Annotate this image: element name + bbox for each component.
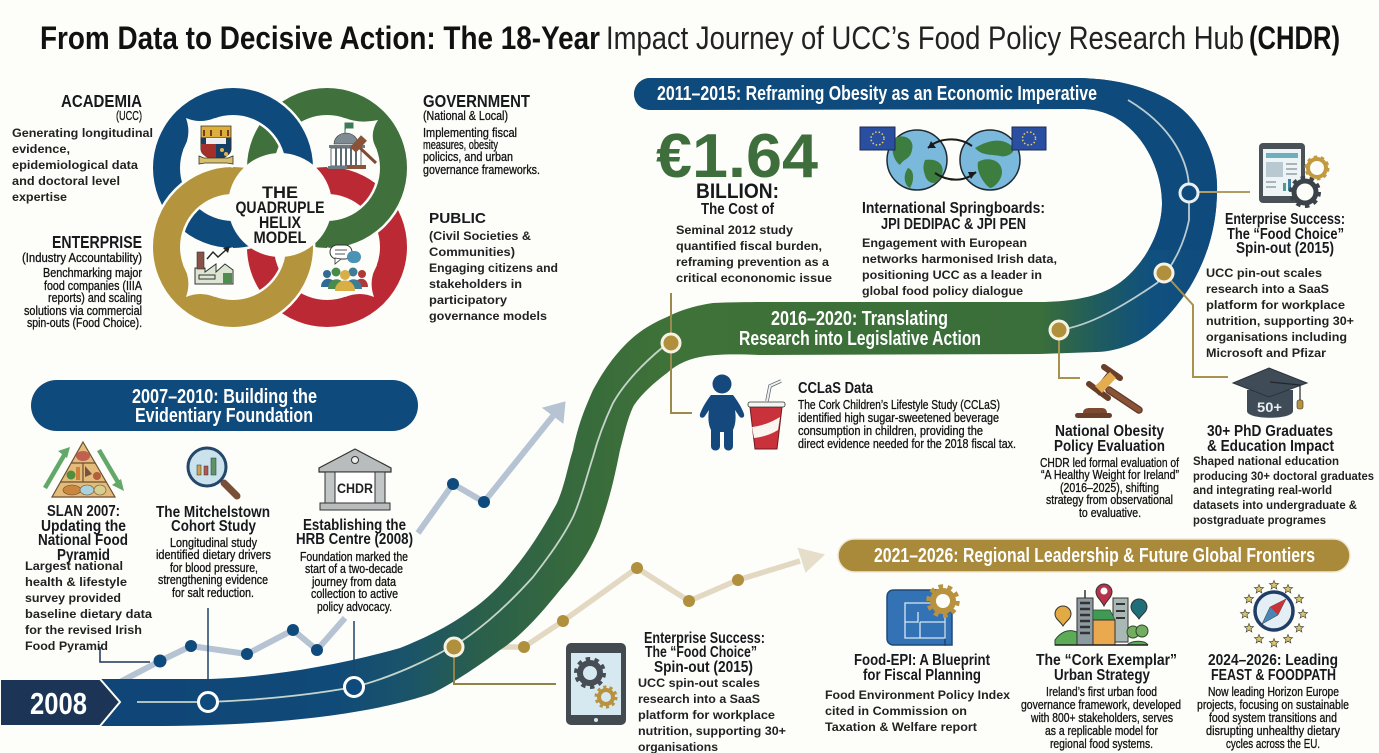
body: cost: [676, 223, 832, 285]
body: cost: reframing prevention as a: [676, 255, 829, 269]
heading: enterprise bottom: The “Food Choice”: [645, 644, 757, 661]
blue rising arrow: [118, 402, 565, 683]
icon: gavel: [1075, 367, 1139, 418]
body: enterprise success: UCC pin-out scales: [1206, 266, 1322, 280]
heading: enterprise bottom: Spin-out (2015): [654, 659, 753, 676]
heading: billion: The Cost of: [701, 201, 775, 218]
heading: national obesity: National Obesity: [1055, 423, 1164, 440]
body: cost: critical econonomic issue: [676, 271, 832, 285]
icon: CHDR temple: [319, 449, 391, 510]
body: Cork: governance framework, developed: [1021, 697, 1181, 712]
heading: 2016-2020: Research into Legislative Action: [739, 328, 981, 350]
body: SLAN: Food Pyramid: [25, 639, 108, 653]
icon: tablet and gears: [1259, 143, 1328, 206]
timeline nodes: [198, 184, 1198, 712]
icon: blueprint and gear: [887, 586, 958, 645]
icon: university crest: [199, 126, 233, 164]
heading: FEAST: [1208, 652, 1338, 684]
body: SLAN: survey provided: [25, 591, 121, 605]
text: academia: Generating longitudinal: [12, 126, 153, 140]
blue arrow nodes: [154, 478, 490, 668]
body: SLAN: [25, 559, 152, 653]
panel: SLAN 2007: [25, 442, 152, 653]
leader lines: [100, 192, 1250, 702]
panel: enterprise success bottom: [566, 630, 786, 753]
text: public: Communities): [429, 245, 515, 259]
body: Cork: Ireland’s first urban food: [1046, 684, 1157, 699]
body: Mitchelstown: for blood pressure,: [170, 560, 258, 575]
panel: enterprise success top right: [1206, 143, 1354, 360]
heading: Cork: The “Cork Exemplar”: [1036, 652, 1177, 669]
body: springboards: networks harmonised Irish data,: [862, 252, 1057, 266]
heading: Food-EPI: Food-EPI: A Blueprint: [854, 652, 991, 669]
text: academia: epidemiological data: [12, 158, 138, 172]
text: enterprise: reports) and scaling: [48, 290, 142, 305]
text: government: governance frameworks.: [423, 162, 540, 177]
body: FEAST: disrupting unhealthy dietary: [1206, 723, 1340, 738]
text: public: participatory: [429, 293, 507, 307]
icon: compass and EU stars: [1240, 580, 1308, 647]
main timeline road: [90, 78, 1217, 726]
heading: enterprise success: Spin-out (2015): [1236, 240, 1334, 257]
body: HRB: Foundation marked the: [300, 549, 408, 564]
body: SLAN: health & lifestyle: [25, 575, 127, 589]
title: From Data to Decisive Action: The 18-Year: [40, 20, 600, 56]
heading: springboards: JPI DEDIPAC & JPI PEN: [881, 216, 1026, 233]
heading: enterprise bottom: Enterprise Success:: [644, 630, 765, 647]
heading: HRB: HRB Centre (2008): [296, 531, 413, 548]
body: Cork: [1021, 684, 1181, 751]
text: government: measures, obesity: [423, 137, 498, 152]
body: HRB: policy advocacy.: [317, 599, 392, 614]
body: Mitchelstown: for salt reduction.: [172, 585, 254, 600]
heading: Cork: Urban Strategy: [1054, 667, 1150, 684]
body: Food-EPI: [825, 688, 1010, 734]
text: enterprise: [22, 232, 143, 330]
text: public: [429, 210, 558, 323]
ring: academia: [166, 102, 300, 234]
heading: FEAST: 2024–2026: Leading: [1208, 652, 1338, 669]
panel: HRB Centre: [296, 449, 413, 614]
body: enterprise bottom: platform for workplace: [638, 708, 775, 722]
body: CCLaS: The Cork Children’s Lifestyle Study (CCLaS): [798, 397, 1000, 412]
body: enterprise success: [1206, 266, 1354, 360]
centre hub: QUADRUPLE: [236, 199, 324, 217]
body: FEAST: [1197, 684, 1349, 751]
body: cost: Seminal 2012 study: [676, 223, 793, 237]
text: public: PUBLIC: [429, 210, 486, 227]
body: PhD: and integrating real-world: [1193, 483, 1332, 497]
heading: SLAN: National Food: [38, 532, 128, 549]
centre hub: THE: [262, 184, 298, 202]
body: Mitchelstown: identified dietary drivers: [156, 547, 271, 562]
heading pill: 2021-2026: [838, 539, 1350, 572]
icon: graduation cap: [1233, 368, 1307, 418]
year banner: 2008: 2008: [30, 686, 87, 721]
icon: CHDR temple: CHDR: [337, 481, 373, 496]
body: PhD: Shaped national education: [1193, 454, 1339, 468]
body: PhD: datasets into undergraduate &: [1193, 498, 1357, 512]
body: FEAST: cycles across the EU.: [1226, 736, 1320, 751]
body: HRB: journey from data: [311, 574, 397, 589]
ring: enterprise: [166, 180, 300, 314]
heading: 2016-2020: 2016–2020: Translating: [771, 308, 948, 330]
title: Impact Journey of UCC’s Food Policy Research Hub: [606, 20, 1244, 56]
heading: springboards: [862, 200, 1045, 233]
heading: national obesity: Policy Evaluation: [1054, 438, 1165, 455]
heading: Mitchelstown: The Mitchelstown: [156, 504, 270, 521]
body: HRB: [300, 549, 408, 614]
text: academia: (UCC): [116, 108, 142, 123]
body: Food-EPI: Taxation & Welfare report: [825, 720, 977, 734]
heading: SLAN: Updating the: [41, 518, 126, 535]
icon: citizens and chat: [321, 245, 368, 291]
body: national obesity: [1040, 455, 1179, 520]
panel: CCLaS: [700, 374, 1016, 451]
body: Cork: with 800+ stakeholders, serves: [1030, 710, 1173, 725]
body: national obesity: CHDR led formal evaluation of: [1040, 455, 1179, 470]
heading: enterprise success: [1225, 211, 1345, 257]
text: public: stakeholders in: [429, 277, 522, 291]
title: (CHDR): [1249, 20, 1340, 56]
text: government: (National & Local): [423, 108, 508, 123]
panel: Cork Exemplar: [1021, 584, 1181, 751]
text: academia: and doctoral level: [12, 174, 120, 188]
body: SLAN: for the revised Irish: [25, 623, 142, 637]
body: enterprise bottom: UCC spin-out scales: [638, 676, 760, 690]
quadruple helix diagram: [166, 102, 394, 314]
ring: government: [260, 102, 394, 234]
body: national obesity: “A Healthy Weight for Ireland”: [1041, 467, 1179, 482]
heading: Mitchelstown: Cohort Study: [171, 518, 256, 535]
body: enterprise success: platform for workplace: [1206, 298, 1345, 312]
big number: €1.64: [656, 122, 819, 191]
icon: globes and EU flags: [860, 127, 1046, 190]
body: Mitchelstown: Longitudinal study: [170, 535, 257, 550]
gold arrow nodes: [518, 562, 744, 653]
text: enterprise: Benchmarking major: [43, 265, 143, 280]
icon: graduation cap: 50+: [1257, 399, 1282, 415]
centre hub: HELIX: [259, 214, 301, 232]
heading: CCLaS: CCLaS Data: [798, 380, 873, 397]
body: PhD: postgraduate programes: [1193, 513, 1326, 527]
icon: government building: [328, 123, 376, 169]
heading: national obesity: [1054, 423, 1165, 455]
heading: Food-EPI: [854, 652, 991, 684]
body: Cork: regional food systems.: [1050, 736, 1153, 751]
ring: public: [260, 180, 394, 314]
heading: billion: BILLION:: [696, 180, 779, 203]
body: Food-EPI: cited in Commission on: [825, 704, 967, 718]
icon: magnifier: [188, 448, 237, 496]
text: academia: ACADEMIA: [61, 91, 142, 111]
heading: Food-EPI: for Fiscal Planning: [863, 667, 981, 684]
heading: springboards: International Springboards:: [862, 200, 1045, 217]
year banner: 2008: [0, 679, 120, 726]
body: springboards: Engagement with European: [862, 236, 1027, 250]
heading: enterprise success: The “Food Choice”: [1227, 226, 1344, 243]
text: academia: expertise: [12, 190, 67, 204]
body: CCLaS: identified high sugar-sweetened beverage: [798, 410, 999, 425]
body: Food-EPI: Food Environment Policy Index: [825, 688, 1010, 702]
body: enterprise success: Microsoft and Pfizar: [1206, 346, 1326, 360]
body: enterprise bottom: [638, 676, 786, 753]
body: springboards: global food policy dialogue: [862, 284, 1023, 298]
body: CCLaS: direct evidence needed for the 2018 fiscal tax.: [798, 436, 1016, 451]
icon: food pyramid: [45, 442, 124, 497]
heading: PhD: 30+ PhD Graduates: [1207, 423, 1333, 440]
text: enterprise: spin-outs (Food Choice).: [27, 315, 142, 330]
body: enterprise success: nutrition, supporting 30+: [1206, 314, 1354, 328]
body: CCLaS: [798, 397, 1016, 451]
text: public: Engaging citizens and: [429, 261, 558, 275]
text: public: governance models: [429, 309, 547, 323]
body: springboards: positioning UCC as a leader in: [862, 268, 1042, 282]
heading: SLAN: Pyramid: [57, 547, 110, 564]
panel: FEAST and FOODPATH: [1197, 580, 1349, 751]
panel: Mitchelstown: [156, 448, 271, 600]
body: springboards: [862, 236, 1057, 298]
heading: HRB: Establishing the: [303, 517, 406, 534]
panel: national obesity policy: [1040, 367, 1179, 520]
centre hub: MODEL: [254, 229, 306, 247]
text: enterprise: solutions via commercial: [24, 303, 142, 318]
body: cost: quantified fiscal burden,: [676, 239, 822, 253]
body: CCLaS: consumption in children, providing the: [798, 423, 983, 438]
body: SLAN: Largest national: [25, 559, 123, 573]
heading: Mitchelstown: [156, 504, 270, 535]
heading: FEAST: FEAST & FOODPATH: [1211, 667, 1336, 684]
body: national obesity: strategy from observational: [1046, 492, 1173, 507]
body: national obesity: to evaluative.: [1079, 505, 1141, 520]
text: enterprise: (Industry Accountability): [22, 250, 142, 265]
heading pill: 2007-2010: 2007–2010: Building the: [132, 386, 317, 408]
panel: cost of obesity: [656, 122, 832, 285]
text: government: policics, and urban: [423, 149, 513, 164]
text: academia: [12, 91, 153, 204]
text: public: (Civil Societies &: [429, 229, 531, 243]
gold rising arrow: [498, 549, 823, 647]
heading: PhD: [1207, 423, 1335, 455]
body: enterprise success: organisations including: [1206, 330, 1347, 344]
body: enterprise success: research into a SaaS: [1206, 282, 1329, 296]
title: [40, 20, 1340, 56]
heading: PhD: & Education Impact: [1207, 438, 1335, 455]
icon: factory: [195, 246, 233, 284]
heading: enterprise bottom: [644, 630, 765, 676]
icon: tablet with gears: [566, 643, 626, 725]
body: Cork: as a replicable model for: [1045, 723, 1159, 738]
heading: Cork: [1036, 652, 1177, 684]
heading: 2016-2020: [739, 308, 981, 350]
heading: SLAN: [38, 503, 128, 564]
body: SLAN: baseline dietary data: [25, 607, 152, 621]
body: FEAST: food system transitions and: [1209, 710, 1337, 725]
heading pill: 2007-2010: Evidentiary Foundation: [135, 405, 313, 427]
body: Mitchelstown: strengthening evidence: [158, 572, 268, 587]
body: FEAST: Now leading Horizon Europe: [1208, 684, 1339, 699]
panel: international springboards: [860, 127, 1057, 298]
text: government: Implementing fiscal: [423, 125, 517, 140]
heading: SLAN: SLAN 2007:: [47, 503, 120, 520]
icon: child and soft drink: [700, 374, 785, 450]
heading pill: 2007-2010: [31, 380, 418, 431]
text: government: GOVERNMENT: [423, 91, 530, 111]
text: government: [423, 91, 540, 177]
body: HRB: start of a two-decade: [305, 561, 403, 576]
panel: Food-EPI: [825, 586, 1010, 734]
body: Mitchelstown: [156, 535, 271, 600]
heading: HRB: [296, 517, 413, 548]
text: enterprise: ENTERPRISE: [52, 232, 142, 252]
panel: PhD graduates: [1193, 368, 1374, 527]
icon: city with pins: [1055, 584, 1148, 645]
body: PhD: [1193, 454, 1374, 527]
body: HRB: collection to active: [311, 586, 398, 601]
heading: enterprise success: Enterprise Success:: [1225, 211, 1345, 228]
body: national obesity: (2016–2025), shifting: [1060, 480, 1159, 495]
white petal corners: [183, 118, 378, 297]
text: academia: evidence,: [12, 142, 70, 156]
text: enterprise: food companies (IIIA: [44, 278, 142, 293]
centre hub: [228, 153, 332, 257]
body: enterprise bottom: research into a SaaS: [638, 692, 760, 706]
body: enterprise bottom: nutrition, supporting 30+: [638, 724, 786, 738]
heading: billion: [696, 180, 779, 218]
heading: 2011-2015: 2011–2015: Reframing Obesity as an Economic Imperative: [657, 83, 1097, 105]
